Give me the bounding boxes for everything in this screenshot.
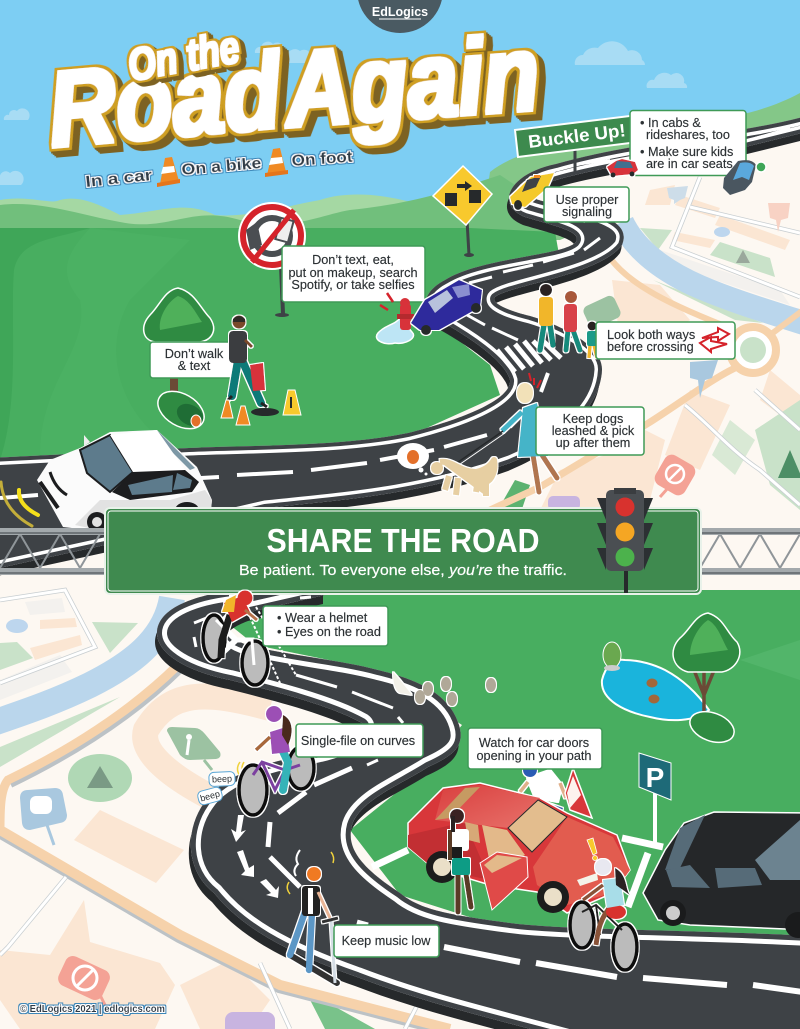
callout: car doors: Watch for car doors bbox=[479, 736, 589, 750]
road arrows bbox=[231, 815, 279, 898]
lower grass bbox=[230, 590, 800, 940]
callout: cabs and car seats: rideshares, too bbox=[646, 128, 730, 142]
icon: tree sign right bbox=[778, 450, 800, 478]
road dashes bbox=[194, 597, 800, 993]
icon: man walking and texting bbox=[228, 316, 267, 407]
road dashes bbox=[0, 128, 790, 498]
subtitle: On foot bbox=[291, 149, 354, 170]
callout: signaling: signaling bbox=[562, 205, 612, 219]
icon: parking sign bbox=[639, 753, 671, 847]
callout: helmet: • Eyes on the road bbox=[277, 625, 381, 639]
callout: helmet: • Wear a helmet bbox=[277, 611, 368, 625]
callout: don't walk: & text bbox=[178, 359, 211, 373]
diamond seatbelt sign bbox=[433, 166, 492, 257]
wheels bbox=[426, 851, 458, 883]
icon: tree circle bbox=[68, 754, 132, 802]
icon: red arrows bbox=[700, 328, 729, 352]
icon: bus sign upper bbox=[690, 360, 718, 398]
lower road bbox=[155, 580, 800, 1029]
icon: geese bbox=[393, 672, 496, 706]
callout: cabs and car seats bbox=[630, 110, 746, 176]
icon: cone bbox=[157, 157, 180, 187]
buckle up road sign bbox=[515, 115, 638, 172]
buckle up road sign: Buckle Up! bbox=[527, 120, 627, 152]
logo badge: EdLogics bbox=[372, 5, 428, 19]
beep bubbles: beep bbox=[199, 789, 221, 803]
sky bbox=[0, 0, 800, 235]
icon: map signs bbox=[20, 186, 800, 1029]
callout: cabs and car seats: • In cabs & bbox=[640, 116, 701, 130]
map ponds bbox=[714, 227, 730, 237]
callout: signaling: Use proper bbox=[556, 193, 619, 207]
icon: bike sign upper bbox=[548, 496, 580, 510]
title bbox=[43, 12, 543, 170]
icon: scooter rider bbox=[287, 850, 338, 983]
callout: look both ways: Look both ways bbox=[607, 328, 695, 342]
hills bbox=[0, 93, 800, 250]
woman standing bbox=[450, 809, 471, 912]
title: Road: Road bbox=[43, 29, 287, 170]
callout: distractions bbox=[282, 246, 425, 302]
icon: overhead truss bbox=[0, 528, 800, 575]
callout: helmet bbox=[263, 606, 388, 646]
child bbox=[587, 322, 598, 358]
upper grass bbox=[0, 228, 560, 465]
callout: signaling bbox=[544, 187, 629, 222]
icon: pond with ducks bbox=[602, 642, 709, 720]
icon: bush bbox=[686, 706, 738, 748]
icon: parking sign: P bbox=[646, 762, 664, 793]
icon: traffic light bbox=[597, 488, 653, 593]
callout: car doors bbox=[468, 728, 602, 769]
callout: don't walk: Don’t walk bbox=[165, 347, 224, 361]
icon: cones and manhole bbox=[221, 390, 301, 425]
icon: red car with people bbox=[408, 763, 630, 913]
car body bbox=[408, 783, 630, 913]
parking lines bbox=[372, 838, 663, 907]
tagline: Be patient. To everyone else, you’re the traffic. bbox=[239, 563, 567, 579]
clouds bbox=[0, 41, 687, 185]
callout: cabs and car seats: are in car seats bbox=[646, 157, 733, 171]
tan roads bbox=[0, 668, 449, 1029]
icon: bus stop sign bbox=[20, 788, 67, 845]
callout: single-file bbox=[296, 724, 423, 757]
icon: bike sign lower bbox=[225, 1012, 275, 1029]
subtitle: In a car bbox=[85, 167, 153, 191]
icon: small red car bbox=[607, 159, 638, 178]
beep bubbles: beep bbox=[212, 773, 232, 785]
trunk door bbox=[565, 768, 592, 818]
icon: tree left bbox=[144, 288, 214, 395]
icon: cyclist in purple bbox=[238, 706, 314, 815]
icon: tree park bbox=[736, 250, 750, 263]
person in yellow shirt bbox=[539, 284, 553, 350]
callout: keep music low: Keep music low bbox=[342, 934, 431, 948]
callout: distractions: Spotify, or take selfies bbox=[291, 278, 415, 292]
logo badge bbox=[357, 0, 443, 33]
upper road bbox=[0, 115, 800, 578]
icon: pedestrian sign bbox=[167, 727, 220, 770]
man with blue cap bbox=[520, 763, 566, 830]
callout: look both ways bbox=[596, 322, 735, 359]
callout: don't walk bbox=[150, 342, 240, 378]
callout: keep dogs: Keep dogs bbox=[563, 412, 623, 426]
icon: girl cyclist bbox=[570, 859, 637, 970]
icon: walkers bbox=[539, 284, 598, 358]
panel: share the road sign bbox=[105, 508, 701, 594]
callout: distractions: put on makeup, search bbox=[288, 266, 418, 280]
icon: black car bbox=[643, 812, 800, 938]
callout: keep music low bbox=[334, 925, 439, 957]
icon: music notes bbox=[294, 850, 300, 876]
open door bbox=[480, 852, 528, 910]
subtitle: On a bike bbox=[181, 155, 262, 179]
icon: blue car bbox=[411, 280, 482, 335]
icon: taxi bbox=[510, 173, 554, 210]
icon: no dogs lower bbox=[55, 953, 113, 1005]
callout: distractions: Don’t text, eat, bbox=[312, 253, 394, 267]
icon: yellow warning sign bbox=[283, 390, 301, 415]
callout: keep dogs: leashed & pick bbox=[552, 424, 635, 438]
roundabout bbox=[730, 327, 776, 373]
icon: tree right bbox=[673, 613, 740, 748]
icon: yellow motion arcs bbox=[1, 482, 38, 526]
icon: thought bubble squirrel bbox=[397, 443, 429, 476]
icon: cyclist with helmet bbox=[203, 590, 296, 685]
icon: water splash and hydrant bbox=[376, 293, 414, 344]
icon: pedestrian sign upper bbox=[582, 294, 622, 330]
person in red shirt bbox=[564, 291, 580, 350]
subtitle bbox=[85, 148, 354, 191]
no phone sign bbox=[238, 202, 306, 317]
beep bubbles bbox=[197, 771, 235, 806]
icon: woman walking dog bbox=[397, 373, 557, 496]
icon: red alert marks bbox=[529, 373, 541, 388]
river bbox=[622, 222, 800, 325]
icon: white car bbox=[37, 430, 212, 532]
icon: green check bbox=[756, 162, 766, 172]
icon: cone bbox=[265, 148, 288, 177]
callout: look both ways: before crossing bbox=[607, 340, 694, 354]
icon: dog bbox=[431, 460, 495, 496]
copyright line: © EdLogics 2021 | edlogics.com bbox=[20, 1003, 165, 1015]
heading: SHARE THE ROAD bbox=[266, 522, 540, 559]
title: Again: Again bbox=[279, 12, 543, 150]
callout: single-file: Single-file on curves bbox=[301, 734, 415, 748]
icon: sign far bbox=[667, 186, 688, 204]
callout: keep dogs bbox=[536, 407, 644, 455]
icon: car seat bbox=[723, 160, 766, 195]
icon: sign far right bbox=[768, 203, 790, 232]
crosswalk bbox=[497, 341, 561, 372]
callout: car doors: opening in your path bbox=[477, 749, 591, 763]
callout: keep dogs: up after them bbox=[556, 436, 630, 450]
icon: yellow exclamation bbox=[587, 838, 598, 860]
map parks bbox=[0, 228, 800, 767]
icon: bush and squirrel bbox=[151, 384, 211, 436]
callout: cabs and car seats: • Make sure kids bbox=[640, 145, 733, 159]
title: On the: On the bbox=[124, 21, 243, 91]
icon: no dogs upper bbox=[652, 452, 698, 498]
